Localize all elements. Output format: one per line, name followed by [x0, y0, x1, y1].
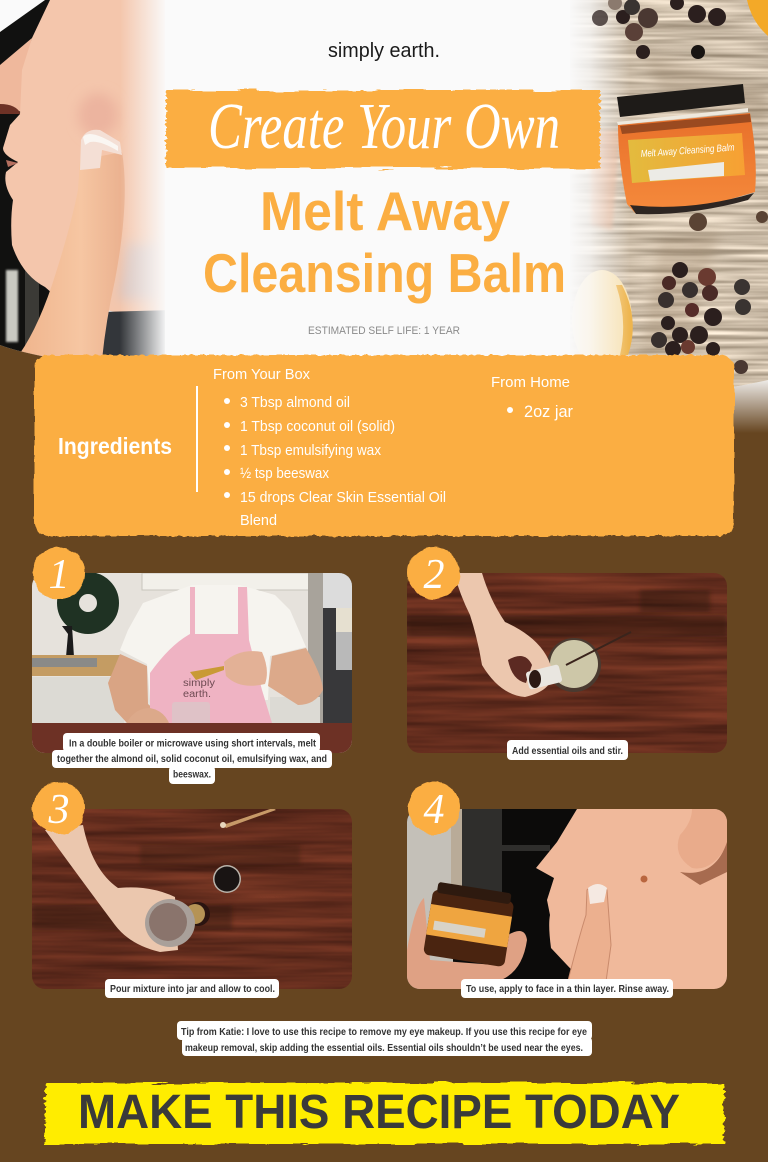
step 4 badge: 4 — [424, 787, 444, 833]
list: from home — [491, 374, 573, 421]
list: from your box: 1 Tbsp emulsifying wax — [240, 442, 381, 459]
apron logo: simply — [183, 678, 215, 689]
ingredients heading: Ingredients — [58, 433, 172, 459]
panel: ingredients — [34, 355, 734, 536]
step 3 badge: 3 — [48, 787, 70, 833]
photo: jar on wood with berries — [575, 0, 768, 387]
list: from your box: 15 drops Clear Skin Essential Oil — [240, 489, 446, 506]
list: from your box: ½ tsp beeswax — [240, 465, 329, 482]
step 1 caption: beeswax. — [173, 768, 211, 780]
step 2 badge: 2 — [424, 552, 444, 598]
step 1 caption: In a double boiler or microwave using short intervals, melt — [69, 738, 316, 750]
divider — [196, 386, 198, 492]
step 3 caption: Pour mixture into jar and allow to cool. — [110, 983, 275, 995]
step 3 badge — [33, 782, 85, 834]
step 1 caption — [52, 733, 332, 784]
list: from home: From Home — [491, 374, 570, 391]
jar — [617, 84, 756, 214]
call to action banner — [45, 1083, 724, 1144]
photo: face with balm — [0, 0, 180, 360]
step 2 caption: Add essential oils and stir. — [512, 745, 623, 757]
step 1 photo — [32, 573, 352, 753]
list: from your box: 3 Tbsp almond oil — [240, 394, 350, 411]
tip from Katie: makeup removal, skip adding the essential oils. Essential oils shouldn’t be used near the eyes. — [185, 1042, 583, 1054]
step 4 caption — [461, 979, 673, 998]
step 4 photo — [407, 809, 727, 989]
step 1 badge — [33, 547, 85, 599]
title — [203, 180, 566, 304]
call to action text: MAKE THIS RECIPE TODAY — [78, 1086, 680, 1139]
step 3 photo — [32, 808, 352, 989]
jar label text: Melt Away Cleansing Balm — [640, 142, 735, 160]
title: Cleansing Balm — [203, 242, 566, 304]
hero banner — [0, 0, 768, 433]
step 1 photo: earth. — [183, 689, 211, 700]
list: from your box — [213, 366, 446, 529]
tip from Katie: Tip from Katie: I love to use this recipe to remove my eye makeup. If you use this recipe for eye — [181, 1026, 587, 1038]
hero photo glow lower right — [730, 375, 768, 433]
step 2 caption — [507, 740, 628, 760]
step 2 badge — [408, 547, 460, 599]
heading brush stroke — [166, 90, 600, 168]
step 4 badge — [408, 782, 460, 834]
title: Melt Away — [260, 180, 510, 242]
list: from your box: Blend — [240, 512, 277, 529]
berries — [592, 0, 768, 374]
tip from Katie — [177, 1021, 592, 1056]
step 1 caption: together the almond oil, solid coconut oil, emulsifying wax, and — [57, 753, 327, 765]
list: from your box: From Your Box — [213, 366, 310, 383]
shelf life note: ESTIMATED SELF LIFE: 1 YEAR — [308, 325, 460, 337]
list: from your box: 1 Tbsp coconut oil (solid) — [240, 418, 395, 435]
heading: Create Your Own: Create Your Own — [208, 90, 560, 163]
step 2 photo — [407, 573, 727, 753]
step 1 badge: 1 — [48, 552, 70, 598]
step 3 caption — [105, 979, 279, 998]
step 4 caption: To use, apply to face in a thin layer. Rinse away. — [466, 983, 669, 995]
logo: simply earth. — [328, 40, 440, 62]
list: from home: 2oz jar — [524, 402, 573, 421]
